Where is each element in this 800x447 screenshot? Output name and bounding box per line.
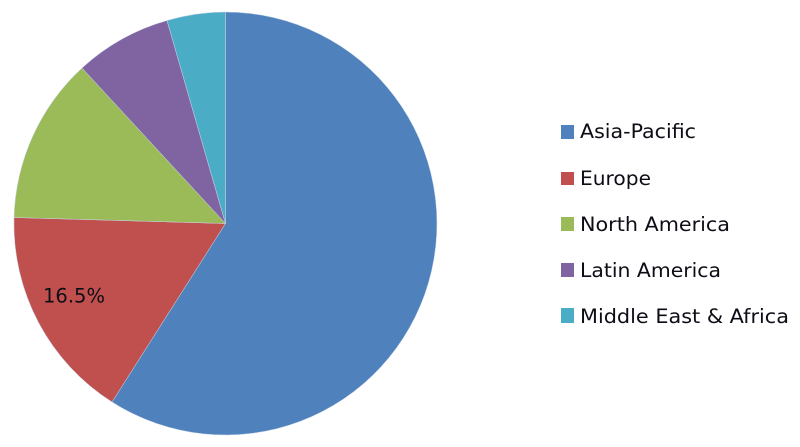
legend item: Middle East & Africa: Middle East & Africa [580, 305, 789, 328]
slice: North America [14, 68, 226, 224]
slice: Latin America [82, 20, 226, 224]
pie chart [14, 12, 437, 435]
slice: Middle East & Africa [167, 12, 226, 224]
data label: Europe 16.5%: 16.5% [43, 284, 105, 308]
legend item: Latin America: Latin America [580, 259, 721, 282]
legend item: North America: North America [580, 213, 730, 236]
legend item: Asia-Pacific: Asia-Pacific [580, 120, 696, 143]
slice: Europe [14, 218, 225, 402]
legend [561, 120, 789, 328]
legend item: Europe: Europe [580, 167, 651, 190]
slice: Asia-Pacific [112, 12, 437, 435]
